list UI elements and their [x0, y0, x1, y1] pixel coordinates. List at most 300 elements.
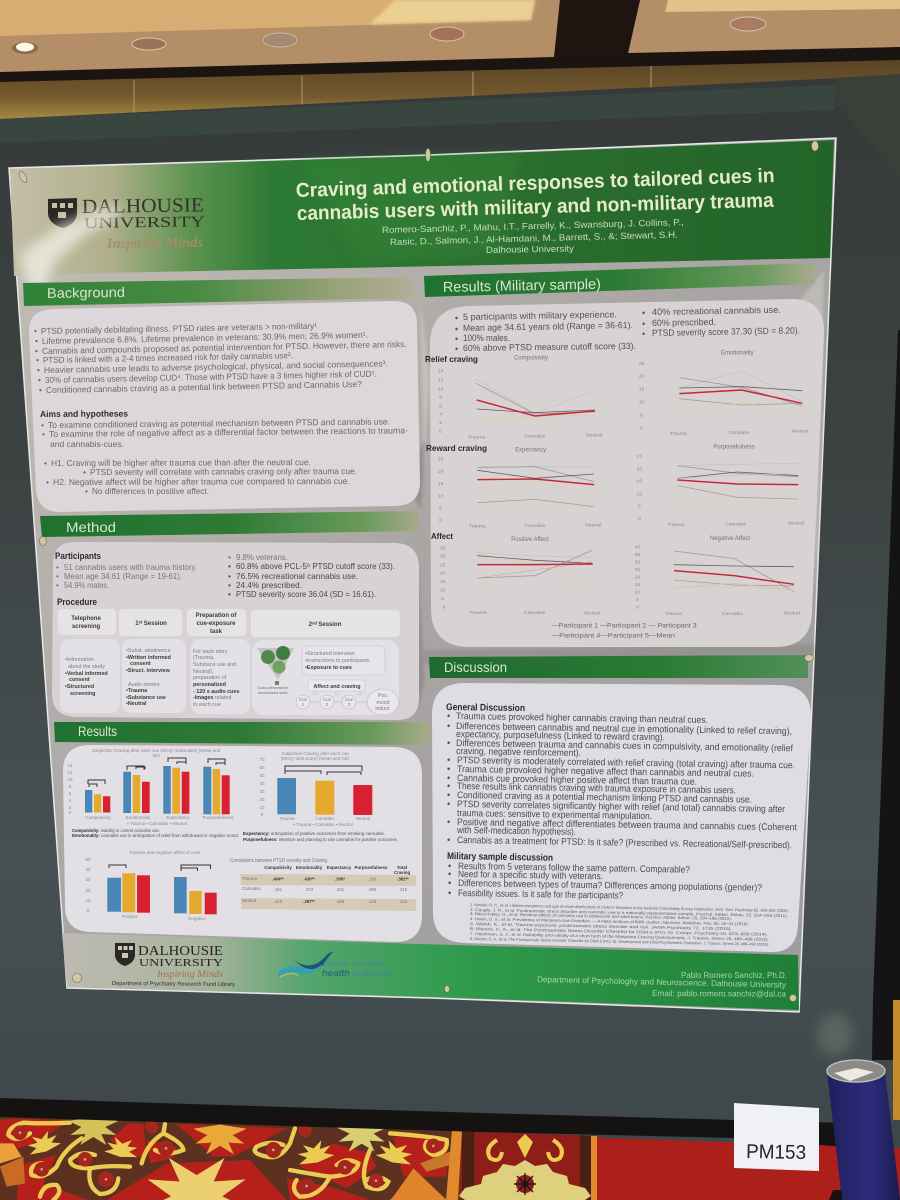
line chart: positive affect: 10 [440, 587, 446, 593]
board bottom frame [0, 1098, 845, 1147]
procedure detail: first session: •Written informed [126, 655, 171, 661]
table: correlations: .158 [336, 899, 345, 904]
text block: general discussion bullets: craving, negative reinforcement). [456, 745, 581, 758]
title: Craving and emotional responses to tailored cues in [295, 165, 775, 202]
bar chart: craving subscales: 6 [69, 791, 72, 796]
diagram: cue sequence [296, 689, 399, 715]
text block: background bullets: • [34, 326, 37, 336]
bar chart: positive and negative affect: Positive [122, 914, 138, 919]
bar chart: total craving: 30 [259, 789, 265, 794]
line chart: emotionality: Trauma [670, 431, 687, 437]
text block: references: 6. Blevins, C. A., et al. The Posttraumatic Stress Disorder Checklist for DSM-5 (PCL-5). Compr. Psychiatry 55, 623–630 (2014). [470, 926, 768, 937]
text block: aims: • [46, 477, 49, 487]
text block: participants left: • [56, 571, 59, 581]
box: interview steps: •Structured interview [305, 651, 355, 657]
line chart: negative affect: Negative Affect [710, 536, 750, 542]
line chart: positive affect [440, 537, 600, 616]
text block: military sample left: 60% above PTSD measure cutoff score (33). [463, 341, 636, 353]
logo: Dalhousie University footer: Department of Psychiatry Research Fund Library [112, 981, 235, 988]
line chart: negative affect: 25 [635, 567, 640, 573]
text block: general discussion bullets: trauma cues: sensitive to experimental manipulation. [457, 807, 652, 821]
table: correlations: Emotionality [296, 865, 323, 870]
procedure detail: preparation: preparation of [193, 675, 227, 681]
header band [10, 140, 834, 283]
text block: background bullets: Lifetime prevalence 6.8%. Lifetime prevalence in veterans: 30.9% men; 26.9% women¹. [42, 330, 368, 346]
logo: Nova Scotia Health Authority: nova scotia [323, 958, 383, 968]
line chart: purposefulness: Purposefulness [713, 444, 755, 450]
line chart: positive affect: 5 [441, 596, 444, 602]
line chart: positive affect: 25 [440, 562, 446, 568]
table: correlations: Total [397, 865, 407, 870]
bar chart: total craving: 70 [259, 757, 265, 762]
line chart: compulsivity: Trauma [468, 434, 485, 440]
text block: aims [41, 416, 408, 496]
text block: background bullets: PTSD potentially debilitating illness. PTSD rates are veterans > non-military¹ [41, 321, 317, 336]
procedure detail: preparation: -Images related [193, 695, 231, 701]
bar chart: total craving: 20 [259, 797, 265, 802]
line chart: expectancy: Neutral [585, 523, 601, 529]
line chart: compulsivity: 0 [439, 428, 442, 434]
bar chart: craving subscales: 2 [69, 805, 72, 810]
procedure step: preparation of cue-exposure task: cue-exposure [196, 621, 236, 627]
text block: military sample right [642, 305, 800, 339]
line chart: compulsivity: 2 [439, 420, 442, 426]
table: correlations [230, 858, 416, 911]
line chart: emotionality: 25 [639, 361, 645, 367]
text block: contact details [537, 971, 787, 999]
line chart: negative affect: Cannabis [722, 611, 743, 617]
line chart: positive affect: Neutral [584, 610, 600, 616]
line chart: emotionality: 10 [639, 400, 645, 406]
table: correlations: .195 [368, 876, 377, 882]
text block: military sample left [455, 309, 636, 354]
heading: general discussion: General Discussion [446, 702, 525, 714]
logo: Dalhousie University: DALHOUSIE [82, 194, 204, 218]
text block: aims: and cannabis-cues. [50, 439, 124, 449]
line chart: expectancy: 5 [439, 505, 442, 511]
text block: military sample left: • [455, 344, 458, 354]
text block: aims: To examine the role of negative affect as a differential factor between the reactions to trauma- [49, 425, 408, 439]
line chart: positive affect: 30 [440, 554, 446, 560]
text block: aims: • [44, 458, 47, 468]
text block: background bullets: • [35, 336, 38, 346]
heading: relief craving: Relief craving [425, 354, 478, 364]
bar chart: total craving: Subjective Craving after each cue [281, 751, 349, 756]
bar chart: total craving: 0 [261, 812, 264, 817]
box: interview steps: •Exposure to cues [305, 665, 352, 671]
bar chart: craving subscales: 10 [67, 777, 73, 782]
bar chart: craving subscales [67, 748, 234, 826]
line chart: compulsivity: 8 [439, 395, 442, 401]
diagram labels: Cue [323, 697, 332, 702]
panel: discussion [429, 655, 811, 952]
line chart: negative affect: 0 [636, 605, 639, 611]
box: interview steps: •Instructions to participants [305, 658, 370, 664]
text block: military sample left: • [455, 334, 458, 344]
text block: general discussion bullets: Conditioned craving as a potential mechanism linking PTSD and cannabis use. [457, 789, 752, 805]
line chart: compulsivity: 6 [439, 403, 442, 409]
bar chart: positive and negative affect: 20 [85, 888, 91, 893]
line charts: military sample [438, 350, 808, 640]
line chart: expectancy: 15 [438, 481, 444, 487]
text block: military sample left: • [455, 313, 458, 323]
bar chart: total craving: 50 [259, 773, 265, 778]
table: correlations: .218 [399, 887, 408, 892]
table: correlations: Cannabis [242, 886, 261, 891]
heading: participants: Participants [55, 551, 101, 561]
procedure step: first session [119, 609, 182, 636]
table: correlations: .404** [272, 876, 284, 882]
logo: Dalhousie University footer [112, 943, 235, 988]
table: correlations: .231 [336, 887, 345, 892]
heading: procedure: Procedure [57, 597, 97, 607]
text block: military sample right: • [642, 329, 645, 339]
text block: aims: To examine conditioned craving as potential mechanism between PTSD and cannabis use. [48, 416, 390, 430]
line chart: expectancy: 10 [438, 493, 444, 499]
procedure detail: first session [122, 639, 186, 713]
table: correlations: .086 [368, 887, 377, 892]
poster number card: PM153 [746, 1141, 806, 1164]
text block: background bullets: PTSD is linked with a 2-4 times increased risk for daily cannabis use². [43, 350, 293, 365]
heading bar: background: Background [47, 284, 125, 301]
text block: participants right: 60.8% above PCL-5⁶ PTSD cutoff score (33). [236, 561, 395, 571]
text block: references: 8. Blevins, C. A., et al. The Posttraumatic Stress Disorder Checklist for DSM-5 (PCL-5): Development and Initial Psychometric Evaluation. J. Trauma. Stress 28, 489–498 (2015). [470, 936, 769, 947]
text block: participants left [56, 562, 197, 590]
text block: general discussion bullets: Cannabis cue provoked higher positive affect than trauma cue. [457, 772, 697, 787]
heading bar: results: Results [78, 723, 117, 739]
poster sheet [9, 138, 836, 1012]
text block: references: 7. Heishman, S. J., et al. Reliability and validity of a short form of the Marijuana Craving Questionnaire. J. Trauma. Stress 28, 489–498 (2015). [470, 931, 769, 942]
heading bar: discussion [429, 655, 808, 678]
text block: references [470, 902, 789, 947]
text block: participants left: • [56, 562, 59, 572]
text block: general discussion bullets: • [447, 720, 450, 731]
procedure detail: preparation: For each story [193, 649, 228, 655]
procedure step: first session: 1ˢᵗ Session [135, 620, 167, 627]
line chart: expectancy: Cannabis [524, 523, 546, 529]
bar chart: total craving: 40 [259, 781, 265, 786]
text block: general discussion bullets: Differences between cannabis and neutral cue in emotionality (Linked to relief craving), [456, 720, 792, 736]
line chart: expectancy: Trauma [469, 524, 486, 530]
bar chart: positive and negative affect: Positive and negative affect of cues [130, 850, 201, 855]
line chart: positive affect: 0 [443, 604, 446, 610]
bar chart: craving subscales: Purposefulness [202, 815, 234, 820]
bar chart: total craving [259, 751, 372, 827]
line chart: compulsivity: 12 [438, 378, 444, 384]
table: correlations: Compulsivity [264, 865, 292, 870]
text block: military discussion bullets: • [448, 887, 451, 898]
glare on logo [20, 205, 120, 300]
text block: military discussion bullets: • [448, 860, 451, 871]
procedure detail: second session [252, 640, 399, 715]
line chart: expectancy [438, 448, 601, 530]
line chart: negative affect: 35 [635, 552, 640, 558]
authors: Dalhousie University [486, 243, 575, 255]
line chart: emotionality: 15 [639, 387, 645, 393]
text block: military discussion bullets: Feasibility issues. Is it safe for the participants? [458, 887, 623, 901]
procedure detail: telephone screening: •Information [65, 657, 94, 663]
text block: general discussion bullets: Positive and negative affect differentiates between trauma and cannabis cues (Coherent [457, 816, 797, 832]
text block: participants right: • [228, 580, 231, 590]
logo: Dalhousie University footer: DALHOUSIE [138, 944, 223, 959]
text block: general discussion bullets: These results link cannabis craving with trauma exposure in cannabis users. [457, 780, 736, 795]
logo: Nova Scotia Health Authority [278, 952, 394, 978]
icon: cue funnel [257, 646, 294, 695]
table: correlations: .210 [274, 899, 283, 904]
heading bar: method: Method [66, 519, 116, 535]
table: correlations: .430** [303, 876, 315, 882]
procedure detail: preparation: - 120 s audio cues [193, 689, 239, 695]
text block: military discussion bullets [448, 860, 762, 901]
text block: general discussion bullets: • [447, 710, 450, 721]
box: affect and craving: Affect and craving [313, 684, 361, 690]
bar chart: craving subscales: 12 [67, 770, 73, 775]
text block: participants left: • [56, 580, 59, 590]
procedure detail: first session: •Neutral [126, 701, 147, 707]
logo: Dalhousie University: UNIVERSITY [84, 214, 205, 232]
line chart: positive affect: 15 [440, 579, 446, 585]
procedure detail: preparation: personalized [193, 682, 226, 688]
text block: references: 5. Walsh, K., et al. Trauma exposure, posttraumatic stress disorder and risk. JAMA Psychiatry 72, 1235 (2015). [470, 921, 732, 931]
text block: background bullets: • [39, 385, 42, 395]
bar chart: positive and negative affect: 10 [85, 898, 91, 903]
line chart: compulsivity: Compulsivity [514, 355, 548, 361]
text block: military sample right: 40% recreational cannabis use. [652, 305, 781, 317]
text block: craving definitions: Expectancy: anticipation of positive outcomes from smoking cannabis. [243, 831, 385, 836]
text block: contact details: Department of Psychologhy and Neuroscience. Dalhousie University [537, 975, 787, 990]
text block: general discussion bullets: • [447, 834, 450, 845]
bar chart: craving subscales: 8 [69, 784, 72, 789]
logo: Dalhousie University: Inspiring Minds [106, 236, 204, 252]
wall wood panel band [0, 60, 900, 119]
line chart: compulsivity [438, 355, 602, 440]
text block: participants left: Mean age 34.61 (Range = 19-61). [64, 571, 182, 581]
text block: background bullets: Heavier cannabis use leads to adverse psychological, physical, and social consequences³. [44, 358, 388, 375]
text block: background bullets: • [36, 355, 39, 365]
text block: general discussion bullets: Trauma cues provoked higher cannabis craving than neutral cues. [456, 710, 708, 725]
text block: military discussion bullets: • [448, 877, 451, 888]
text block: aims: • [85, 486, 88, 496]
text block: references: 1. Kessler, R. C., et al. Lifetime prevalence and age-of-onset distributions of DSM-IV disorders in the National Comorbidity Survey Replication. Arch. Gen. Psychiatry 62, 593–602 (2005). [470, 902, 789, 913]
text block: participants right: • [228, 561, 231, 571]
line chart: compulsivity: 10 [438, 386, 444, 392]
text block: background bullets: 30% of cannabis users develop CUD⁴. Those with PTSD have a 3 times higher risk of CUD⁵. [45, 369, 377, 385]
text block: general discussion bullets: with Self-medication hypothesis). [456, 824, 576, 837]
procedure detail: first session: Audio stories: [128, 682, 161, 688]
heading: military sample discussion: Military sample discussion [447, 851, 553, 864]
text block: participants right: 76.5% recreational cannabis use. [236, 571, 358, 581]
procedure step: telephone screening: Telephone [71, 616, 101, 622]
line chart: emotionality: Emotionality [721, 350, 754, 356]
footer band [62, 933, 799, 1010]
text block: participants right: 9.8% veterans. [236, 552, 288, 562]
procedure step: telephone screening: screening [72, 624, 100, 630]
box: interview steps [302, 646, 385, 675]
text block: military sample right: • [642, 319, 645, 329]
table: correlations: Expectancy [327, 865, 352, 870]
procedure detail: telephone screening: about the study [68, 664, 105, 670]
text block: participants right: • [228, 571, 231, 581]
line chart: negative affect: 40 [635, 544, 640, 550]
bar chart: positive and negative affect: 50 [85, 857, 91, 862]
text block: general discussion bullets: • [447, 789, 450, 800]
line chart: expectancy: 20 [438, 469, 444, 475]
panel: results military sample [424, 263, 824, 647]
text block: participants left: 51 cannabis users with trauma history. [64, 562, 197, 572]
text block: participants right: PTSD severity score 36.04 (SD = 16.61). [236, 589, 376, 599]
procedure detail: first session: •Substance use [126, 695, 166, 701]
text block: general discussion bullets: Trauma cue provoked higher negative affect than cannabis and neutral cues. [457, 763, 754, 779]
logo: Dalhousie University footer: UNIVERSITY [139, 957, 223, 969]
bar chart: craving subscales: SE) [152, 753, 160, 758]
authors [382, 217, 684, 255]
icon: cue funnel: randomized order [258, 691, 289, 695]
text block: military sample right: 60% prescribed. [652, 317, 716, 328]
table: correlations: .382** [397, 876, 409, 882]
text block: contact details: Email: pablo.romero.sanchiz@dal.ca [652, 989, 786, 999]
text block: aims: H2. Negative affect will be higher after trauma cue compared to cannabis cue. [53, 476, 350, 487]
line chart: purposefulness: 20 [637, 466, 642, 472]
text block: background bullets: Conditioned cannabis craving as a potential link between PTSD and Cannabis Use? [46, 379, 362, 395]
text block: background bullets: • [38, 375, 41, 385]
heading: affect: Affect [431, 531, 453, 541]
line chart: negative affect: 15 [635, 582, 640, 588]
logo: Dalhousie University [48, 194, 205, 252]
line chart: expectancy: Expectancy [515, 448, 546, 454]
line chart: negative affect: 5 [636, 597, 639, 603]
diagram labels: induct. [375, 706, 391, 712]
line chart: purposefulness: Cannabis [725, 521, 747, 527]
bar chart: total craving: (MCQ¹ total score) (Mean and SE) [281, 756, 350, 761]
text block: aims: • [42, 429, 45, 439]
text block: contact details: Pablo Romero Sanchiz, Ph.D. [681, 971, 787, 980]
text block: general discussion bullets: Cannabis as a treatment for PTSD: Is it safe? (Prescribed vs. Recreational/Self-prescribed). [457, 834, 792, 850]
text block: aims: H1. Craving will be higher after trauma cue than after the neutral cue. [51, 457, 311, 468]
logo: Nova Scotia Health Authority: authority [352, 968, 394, 978]
text block: background bullets [34, 321, 407, 395]
text block: military discussion bullets: Results from 5 veterans follow the same pattern. Comparable? [458, 860, 690, 875]
line chart: negative affect [635, 536, 800, 617]
procedure detail: preparation: Substace use and [193, 662, 236, 668]
line chart: positive affect: Positive Affect [511, 537, 549, 543]
heading bar: results military sample [424, 263, 815, 297]
bar chart: total craving: ▪ Trauma ▪ Cannabis ▪ Neutral [293, 822, 353, 827]
line chart: purposefulness: 25 [637, 454, 642, 460]
logo: Dalhousie University footer: Inspiring Minds [156, 970, 223, 980]
text block: military discussion bullets: Differences between types of trauma? Differences among populations (gender)? [458, 877, 762, 893]
line chart: negative affect: 20 [635, 574, 640, 580]
procedure step: telephone screening [58, 609, 116, 635]
line chart: purposefulness: Trauma [667, 522, 684, 528]
text block: general discussion bullets: expectancy, purposefulness (Linked to reward craving). [456, 728, 665, 742]
procedure detail: first session: •Subst. abstinence [126, 648, 171, 654]
text block: aims: PTSD severity will correlate with cannabis craving only after trauma cue. [90, 466, 357, 477]
heading bar: background [23, 277, 415, 306]
logo: Nova Scotia Health Authority: health [322, 968, 350, 978]
table: correlations: .300* [335, 876, 345, 882]
heading bar: discussion: Discussion [444, 659, 507, 675]
bar chart: craving subscales: ▪ Trauma ▪ Cannabis ▪ Neutral [127, 821, 187, 826]
diagram labels [299, 693, 391, 712]
text block: general discussion bullets: Differences between trauma and cannabis cues in compulsivity, and emotionality (relief [456, 737, 793, 753]
authors: Romero-Sanchiz, P., Mahu, I.T., Farrelly, K., Swansburg, J. Collins, P., [382, 217, 684, 235]
diagram labels: Pos. [378, 693, 388, 699]
text block: references: 2. Cougle, J. R., et al. Posttraumatic stress disorder and cannabis use in a nationally representative sample. Psychol. Addict. Behav. 25, 554–558 (2011). [470, 907, 788, 918]
text block: participants right: 24.4% prescribed. [236, 580, 302, 590]
diagram labels: 1 [302, 702, 305, 707]
authors: Rasic, D., Salmon, J., Al-Hamdani, M., Barrett, S., &; Stewart, S.H. [390, 229, 678, 247]
procedure detail: preparation: to each cue [193, 702, 221, 708]
diagram labels: mood [377, 700, 390, 706]
table: correlations: Trauma [242, 876, 258, 881]
procedure detail: telephone screening: •Structured [65, 684, 94, 690]
procedure detail: first session: •Trauma [126, 688, 148, 694]
text block: craving definitions: Emotionality: cannabis use in anticipation of relief from withdrawal or negative mood. [72, 833, 239, 838]
line chart: expectancy: 0 [439, 518, 442, 524]
bar chart: craving subscales: 14 [67, 763, 73, 768]
heading bar: results military sample: Results (Military sample) [443, 277, 601, 296]
line chart: negative affect: Neutral [784, 610, 800, 616]
icon: cue funnel: Cues presented in [258, 686, 288, 690]
text block: military sample left: 5 participants with military experience. [463, 309, 617, 322]
text block: craving definitions: Compulsivity: inability to control cannabis use. [72, 828, 160, 833]
diagram labels: 2 [326, 702, 329, 707]
heading bar: method [40, 511, 420, 537]
procedure detail: preparation: Neutral), [193, 669, 214, 675]
line chart: emotionality: Neutral [792, 429, 808, 435]
line chart: compulsivity: 14 [438, 369, 444, 375]
line chart: purposefulness: 0 [638, 516, 641, 522]
table: correlations: Correlations between PTSD severity and Craving [230, 858, 327, 864]
line chart: expectancy: 25 [438, 456, 444, 462]
text block: participants right: • [228, 552, 231, 562]
bar chart: craving subscales: Emotionality [126, 815, 151, 820]
text block: general discussion bullets [447, 710, 797, 850]
table: correlations: .161 [274, 887, 283, 892]
text block: general discussion bullets: • [447, 772, 450, 783]
table: correlations: .297** [303, 899, 315, 904]
line chart: purposefulness: 15 [637, 479, 642, 485]
text block: general discussion bullets: PTSD severity is moderately correlated with relief craving (total craving) after trauma cue. [457, 754, 795, 770]
procedure step: preparation of cue-exposure task [187, 609, 246, 636]
text block: military discussion bullets: • [448, 868, 451, 879]
line chart: negative affect: 30 [635, 560, 640, 566]
table: correlations: Craving [394, 870, 410, 875]
text block: military discussion bullets: Need for a specific study with veterans. [458, 868, 603, 881]
procedure detail: first session: consent [130, 661, 151, 667]
line chart: emotionality: Cannabis [728, 430, 750, 436]
heading: aims and hypotheses: Aims and hypotheses [40, 409, 128, 419]
background foliage texture [44, 270, 824, 710]
chart legend: —Participant 4—Participant 5—Mean [552, 633, 675, 640]
table: correlations: .273 [305, 887, 314, 892]
text block: general discussion bullets: • [447, 780, 450, 791]
line chart: emotionality: 20 [639, 374, 645, 380]
bar chart: total craving: 10 [259, 805, 265, 810]
line chart: purposefulness: 5 [638, 504, 641, 510]
text block: military sample right: • [642, 308, 645, 318]
procedure step: preparation of cue-exposure task: Preparation of [196, 613, 237, 619]
text block: participants left: 54.9% males. [64, 580, 109, 590]
bar chart: craving subscales: Subjective Craving after each cue (MCQ¹ Subscales) (Mean and [92, 748, 221, 753]
title [295, 165, 775, 225]
bar chart: craving subscales: Expectancy [166, 815, 190, 820]
chart legend: —Participant 1 —Participant 2 — Participant 3 [552, 623, 697, 630]
procedure detail: preparation: (Trauma, [193, 655, 215, 661]
line chart: compulsivity: Neutral [586, 433, 602, 439]
text block: references: 4. Hasin, D. S., et al. Prevalence of Marijuana Use Disorders — A meta-analysis of fMRI studies. Neurosci. Biobehav. Rev. 88, 28–41 (2018). [470, 916, 749, 926]
procedure detail: first session: •Struct. interview [126, 668, 171, 674]
